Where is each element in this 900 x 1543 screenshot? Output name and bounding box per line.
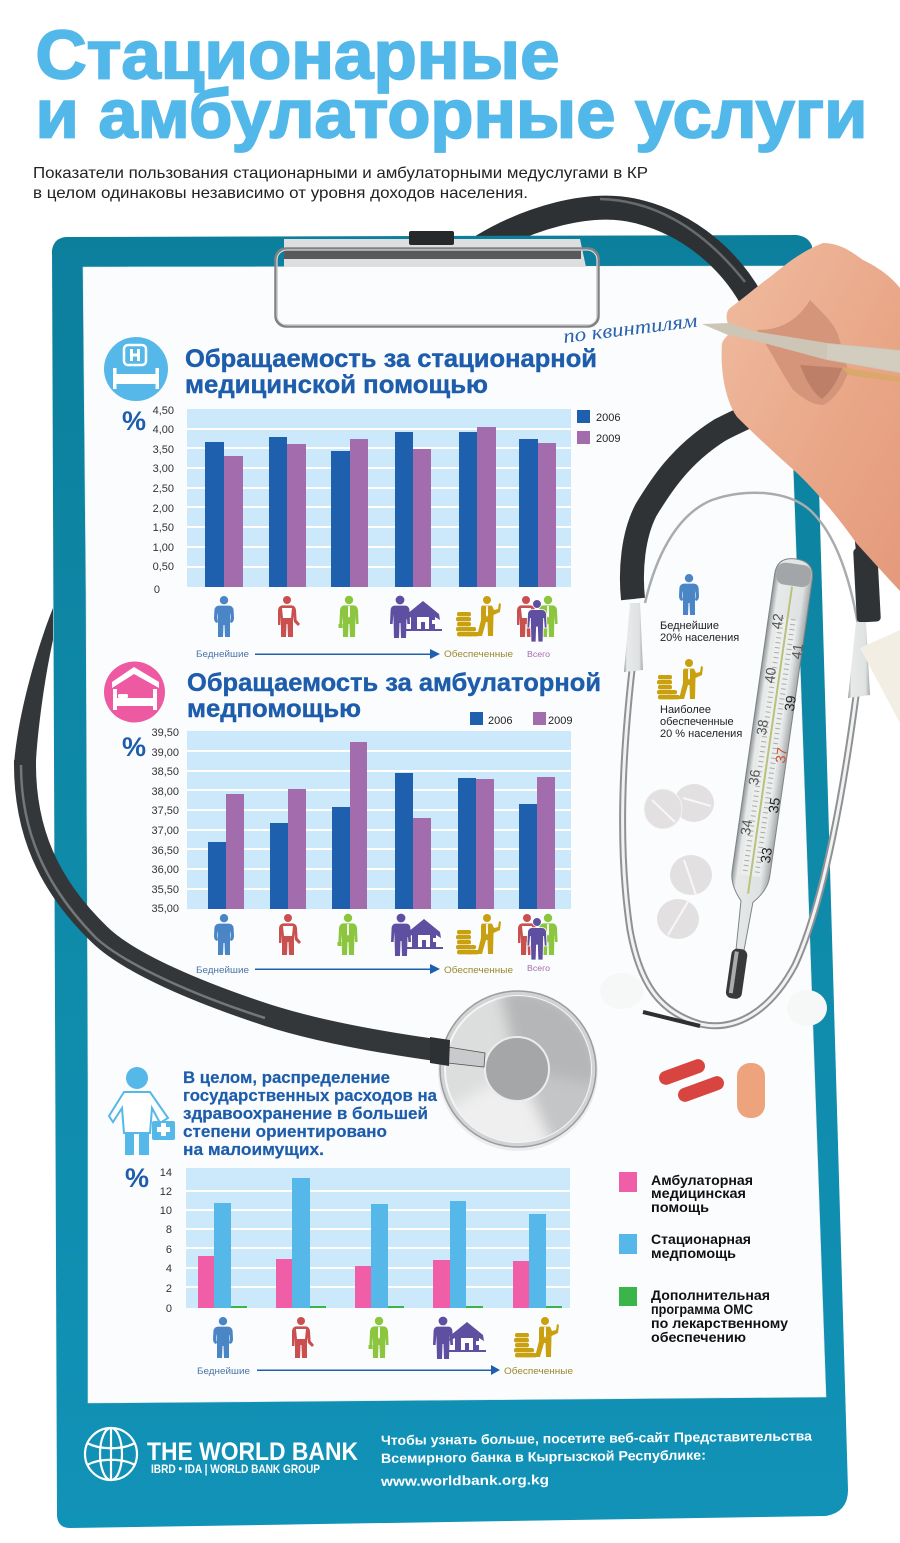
ear tips — [600, 973, 827, 1026]
thermometer: 38 — [753, 718, 771, 736]
panel: outpatient — [104, 662, 601, 960]
thermometer — [714, 556, 815, 1001]
bar chart: 36,50 — [151, 845, 179, 857]
bar chart: 37,00 — [151, 825, 179, 837]
legend: richest: 20 % населения — [660, 728, 742, 740]
intro text: Показатели пользования стационарными и амбулаторными медуслугами в КР — [33, 165, 648, 182]
scale arrow — [196, 964, 551, 976]
bar chart: 0 — [154, 584, 160, 596]
bar chart: 4 — [166, 1263, 172, 1275]
scale arrow — [196, 649, 551, 660]
heading: медпомощью — [187, 695, 361, 723]
icon: doctor — [109, 1067, 175, 1155]
scale arrow: Обеспеченные — [444, 965, 513, 976]
bar chart: 14 — [160, 1167, 172, 1179]
stethoscope upper tube front — [600, 199, 752, 300]
bar chart: 37,50 — [151, 805, 179, 817]
text block: степени ориентировано — [183, 1122, 387, 1141]
thermometer: 35 — [765, 796, 783, 814]
clipboard clip — [276, 231, 598, 326]
thermometer: 42 — [768, 612, 786, 630]
bar chart: 10 — [160, 1205, 172, 1217]
orange pill — [737, 1063, 765, 1118]
scale arrow: Обеспеченные — [444, 649, 513, 660]
legend: 2006 — [488, 715, 512, 727]
legend — [470, 712, 572, 727]
panel: inpatient — [104, 337, 620, 660]
bar chart: 39,50 — [151, 727, 179, 739]
heading: Обращаемость за стационарной — [185, 345, 597, 373]
legend: poorest: 20% населения — [660, 632, 739, 644]
percent sign: % — [122, 406, 146, 436]
thermometer: 33 — [757, 846, 775, 864]
legend: программа ОМС — [651, 1301, 753, 1317]
icon: pink bed — [104, 662, 165, 722]
title: Стационарные — [36, 16, 560, 94]
handwritten note: по квинтилям — [562, 310, 699, 348]
stethoscope upper tube back — [482, 208, 752, 300]
stethoscope chest piece — [430, 989, 601, 1157]
legend: медицинская — [651, 1185, 746, 1201]
quintile icons — [214, 596, 558, 642]
scale arrow: Обеспеченные — [504, 1366, 573, 1377]
stethoscope metal tubes — [623, 493, 858, 1026]
legend — [577, 410, 620, 445]
title: и амбулаторные услуги — [36, 76, 868, 152]
legend: 2009 — [596, 433, 620, 445]
thermometer: 37 — [772, 746, 790, 764]
intro text — [33, 165, 648, 202]
white pills — [644, 784, 714, 939]
thermometer: 39 — [781, 694, 799, 712]
clipboard board — [52, 235, 848, 1528]
bar chart: 0 — [166, 1303, 172, 1315]
text block — [183, 1068, 438, 1159]
panel: spending — [109, 1067, 788, 1377]
legend: poorest — [660, 574, 739, 644]
paper sheet — [83, 266, 826, 1403]
legend: по лекарственному — [651, 1315, 788, 1331]
bar chart: 12 — [160, 1186, 172, 1198]
footer: World Bank logo — [85, 1428, 358, 1480]
footer: call to action: Всемирного банка в Кыргызской Республике: — [381, 1448, 706, 1466]
heading — [185, 345, 597, 399]
bar chart: 35,50 — [151, 884, 179, 896]
scale arrow: Беднейшие — [196, 649, 249, 660]
scale arrow: Всего — [527, 650, 551, 659]
bar chart: 39,00 — [151, 747, 179, 759]
legend: 2006 — [596, 412, 620, 424]
percent sign: % — [125, 1163, 149, 1193]
text block: здравоохранение в большей — [183, 1104, 428, 1123]
bar chart: 2,50 — [153, 483, 174, 495]
footer: call to action: Чтобы узнать больше, посетите веб-сайт Представительства — [381, 1428, 813, 1448]
bar chart — [153, 405, 571, 596]
bar chart: 0,50 — [153, 561, 174, 573]
stethoscope ear tubes — [624, 412, 881, 698]
intro text: в целом одинаковы независимо от уровня доходов населения. — [33, 185, 528, 202]
heading — [187, 669, 601, 723]
heading: медицинской помощью — [185, 371, 488, 399]
thermometer: 41 — [788, 642, 806, 660]
footer: call to action: www.worldbank.org.kg — [380, 1472, 549, 1489]
red capsules — [657, 1057, 726, 1104]
globe — [85, 1428, 137, 1480]
bar chart: 6 — [166, 1244, 172, 1256]
bar chart: 1,00 — [153, 542, 174, 554]
thermometer: 36 — [745, 768, 763, 786]
text block: В целом, распределение — [183, 1068, 390, 1087]
bar chart: 4,50 — [153, 405, 174, 417]
legend: richest: Наиболее — [660, 704, 711, 716]
bar chart: 3,00 — [153, 463, 174, 475]
legend: Дополнительная — [651, 1287, 770, 1303]
thermometer: 34 — [737, 818, 755, 836]
stethoscope big tube — [14, 608, 450, 1052]
bar chart: 2,00 — [153, 503, 174, 515]
logo subline: IBRD • IDA | WORLD BANK GROUP — [151, 1464, 320, 1476]
quintile icons — [214, 914, 558, 960]
text block: государственных расходов на — [183, 1086, 438, 1105]
text block: на малоимущих. — [183, 1140, 324, 1159]
title — [36, 16, 868, 152]
quintile icons — [213, 1317, 559, 1359]
legend: richest — [657, 659, 742, 740]
bar chart: 1,50 — [153, 522, 174, 534]
bar chart: 8 — [166, 1224, 172, 1236]
legend: richest: обеспеченные — [660, 716, 734, 728]
bar chart: 35,00 — [151, 903, 179, 915]
scale arrow: Беднейшие — [196, 965, 249, 976]
bar chart: 36,00 — [151, 864, 179, 876]
bar chart — [160, 1167, 570, 1315]
thermometer: 40 — [761, 666, 779, 684]
bar chart: 38,00 — [151, 786, 179, 798]
legend: помощь — [651, 1199, 709, 1215]
legend: Стационарная — [651, 1231, 751, 1247]
scale arrow — [197, 1365, 573, 1377]
icon: hospital bed — [104, 337, 168, 401]
legend — [619, 1172, 788, 1345]
footer: call to action — [380, 1428, 813, 1489]
bar chart: 38,50 — [151, 766, 179, 778]
scale arrow: Беднейшие — [197, 1366, 250, 1377]
legend: обеспечению — [651, 1329, 746, 1345]
legend: 2009 — [548, 715, 572, 727]
logotype: THE WORLD BANK — [147, 1438, 358, 1466]
heading: Обращаемость за амбулаторной — [187, 669, 601, 697]
bar chart — [151, 727, 571, 915]
bar chart: 3,50 — [153, 444, 174, 456]
bar chart: 4,00 — [153, 424, 174, 436]
legend: poorest: Беднейшие — [660, 620, 719, 632]
bar chart: 2 — [166, 1283, 172, 1295]
percent sign: % — [122, 732, 146, 762]
legend: медпомощь — [651, 1245, 736, 1261]
legend: Амбулаторная — [651, 1172, 753, 1188]
scale arrow: Всего — [527, 964, 551, 973]
hand with pen — [702, 243, 900, 723]
